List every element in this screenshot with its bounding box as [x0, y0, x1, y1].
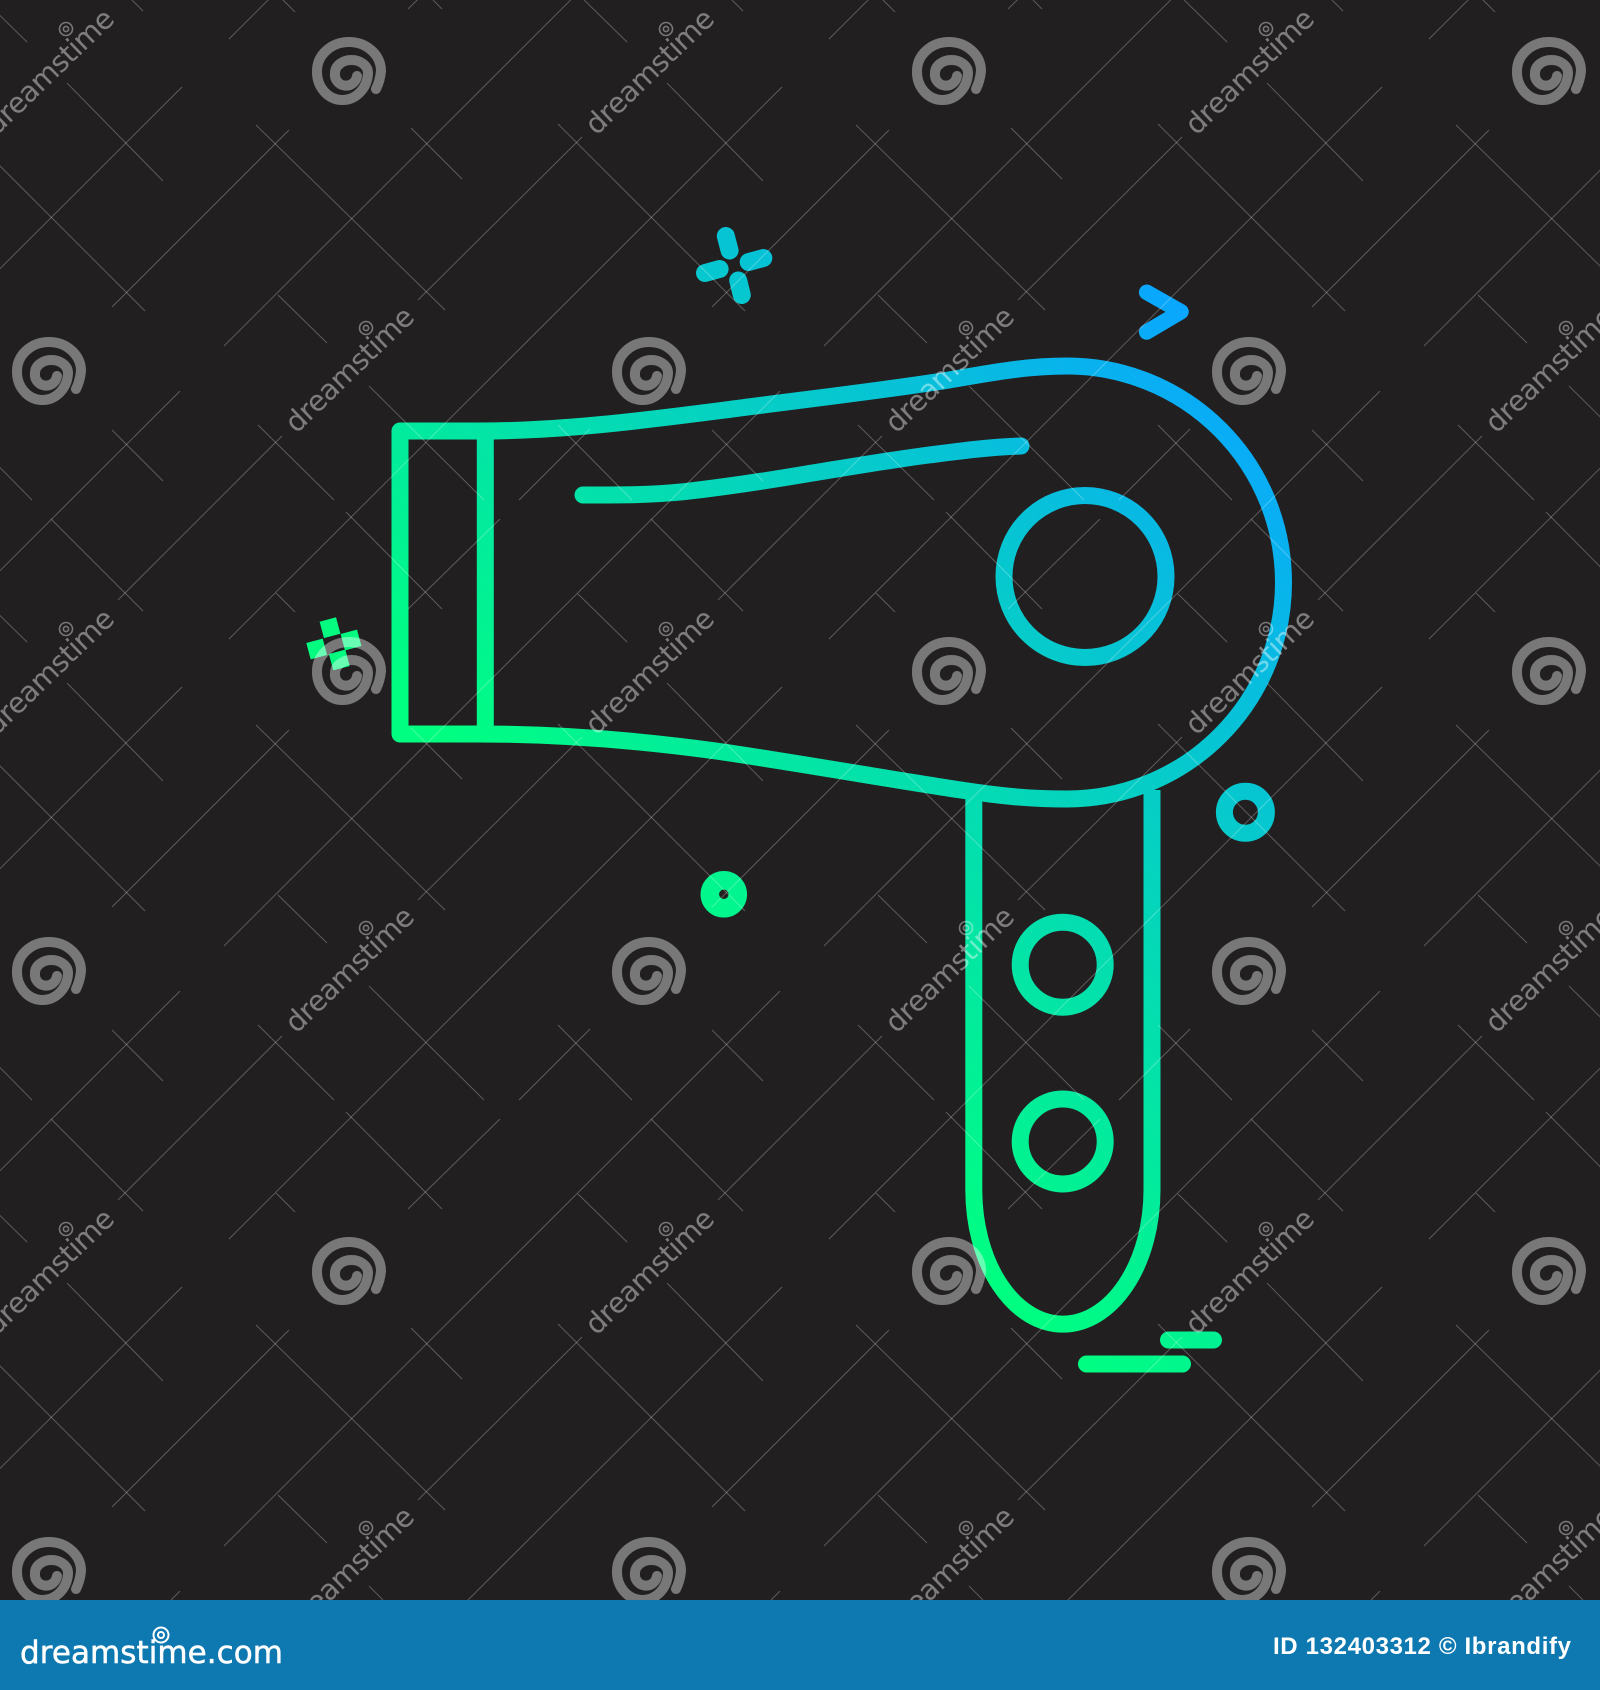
footer logo text: dreamstime.com	[20, 1635, 283, 1671]
decoration: green dot	[710, 880, 738, 908]
handle button upper	[1020, 922, 1105, 1007]
decoration: green squares sparkle	[306, 617, 361, 670]
watermark: dreamstime text: dreamstime	[878, 900, 1021, 1039]
icon: hair dryer	[400, 366, 1284, 1324]
dryer body and nozzle outline	[400, 366, 1284, 799]
watermark: dreamstime text: dreamstime	[1178, 2, 1321, 141]
handle button lower	[1020, 1099, 1105, 1184]
watermark: dreamstime text: dreamstime	[1178, 1202, 1321, 1341]
decoration: small ring	[1224, 791, 1266, 833]
watermark: dreamstime text: dreamstime	[278, 300, 421, 439]
body highlight line	[583, 446, 1021, 495]
footer image id and credit: ID 132403312 © Ibrandify	[1273, 1633, 1572, 1660]
watermark: dreamstime text: dreamstime	[578, 2, 721, 141]
decoration: blue cross sparkle	[705, 236, 763, 295]
footer bar	[0, 1600, 1600, 1690]
watermark: dreamstime text: dreamstime	[578, 1202, 721, 1341]
watermark: dreamstime text: dreamstime	[878, 300, 1021, 439]
body circle	[1004, 496, 1166, 658]
nozzle divider	[477, 431, 494, 734]
watermark: dreamstime text: dreamstime	[578, 602, 721, 741]
handle	[974, 790, 1152, 1324]
watermark: dreamstime text: dreamstime	[278, 900, 421, 1039]
decoration: two dashes	[1086, 1340, 1214, 1364]
decoration: chevron	[1147, 292, 1181, 332]
watermark: dreamstime text: dreamstime	[1178, 602, 1321, 741]
watermark: dreamstime text: dreamstime	[278, 1500, 421, 1639]
watermark: dreamstime text: dreamstime	[878, 1500, 1021, 1639]
footer logo swirl	[154, 1628, 168, 1642]
